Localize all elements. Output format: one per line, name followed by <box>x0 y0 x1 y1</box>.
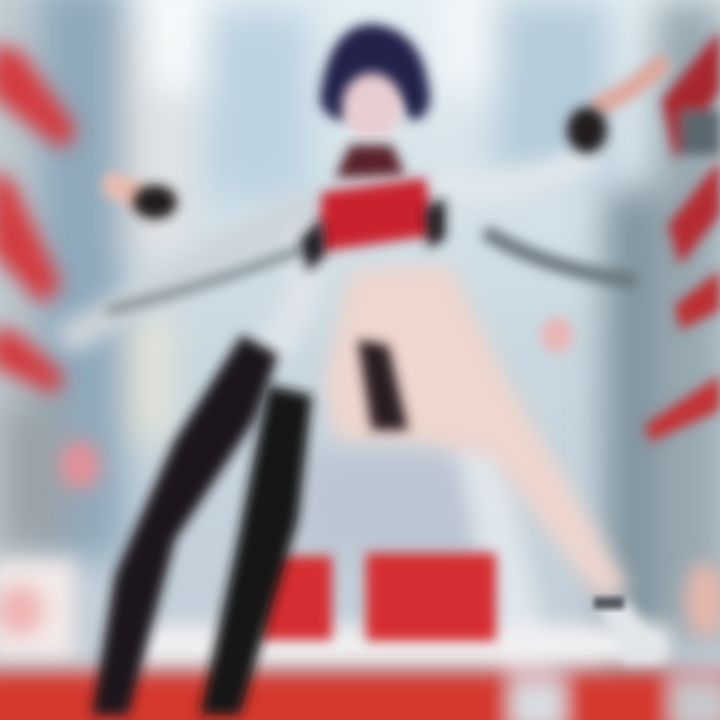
right red structure <box>645 30 720 442</box>
figure <box>75 24 668 715</box>
red top <box>318 178 436 252</box>
coat sleeves <box>75 160 585 350</box>
pale leg <box>325 265 630 600</box>
lower white steps <box>0 560 670 665</box>
hair <box>320 24 430 120</box>
ankle strap <box>594 597 624 609</box>
pale coat panel <box>455 440 560 700</box>
red blocks <box>260 553 496 641</box>
dark trim <box>300 198 445 272</box>
sleeve shadows <box>110 65 660 310</box>
red floor band <box>0 562 720 720</box>
floating pink marker <box>541 317 573 353</box>
left boot <box>92 335 278 715</box>
face <box>342 73 402 139</box>
shoe <box>595 600 668 665</box>
neck and collar <box>335 145 405 178</box>
dark shorts <box>358 340 408 430</box>
right boot <box>200 385 312 715</box>
gloves <box>133 107 607 219</box>
left red accents <box>0 45 100 489</box>
